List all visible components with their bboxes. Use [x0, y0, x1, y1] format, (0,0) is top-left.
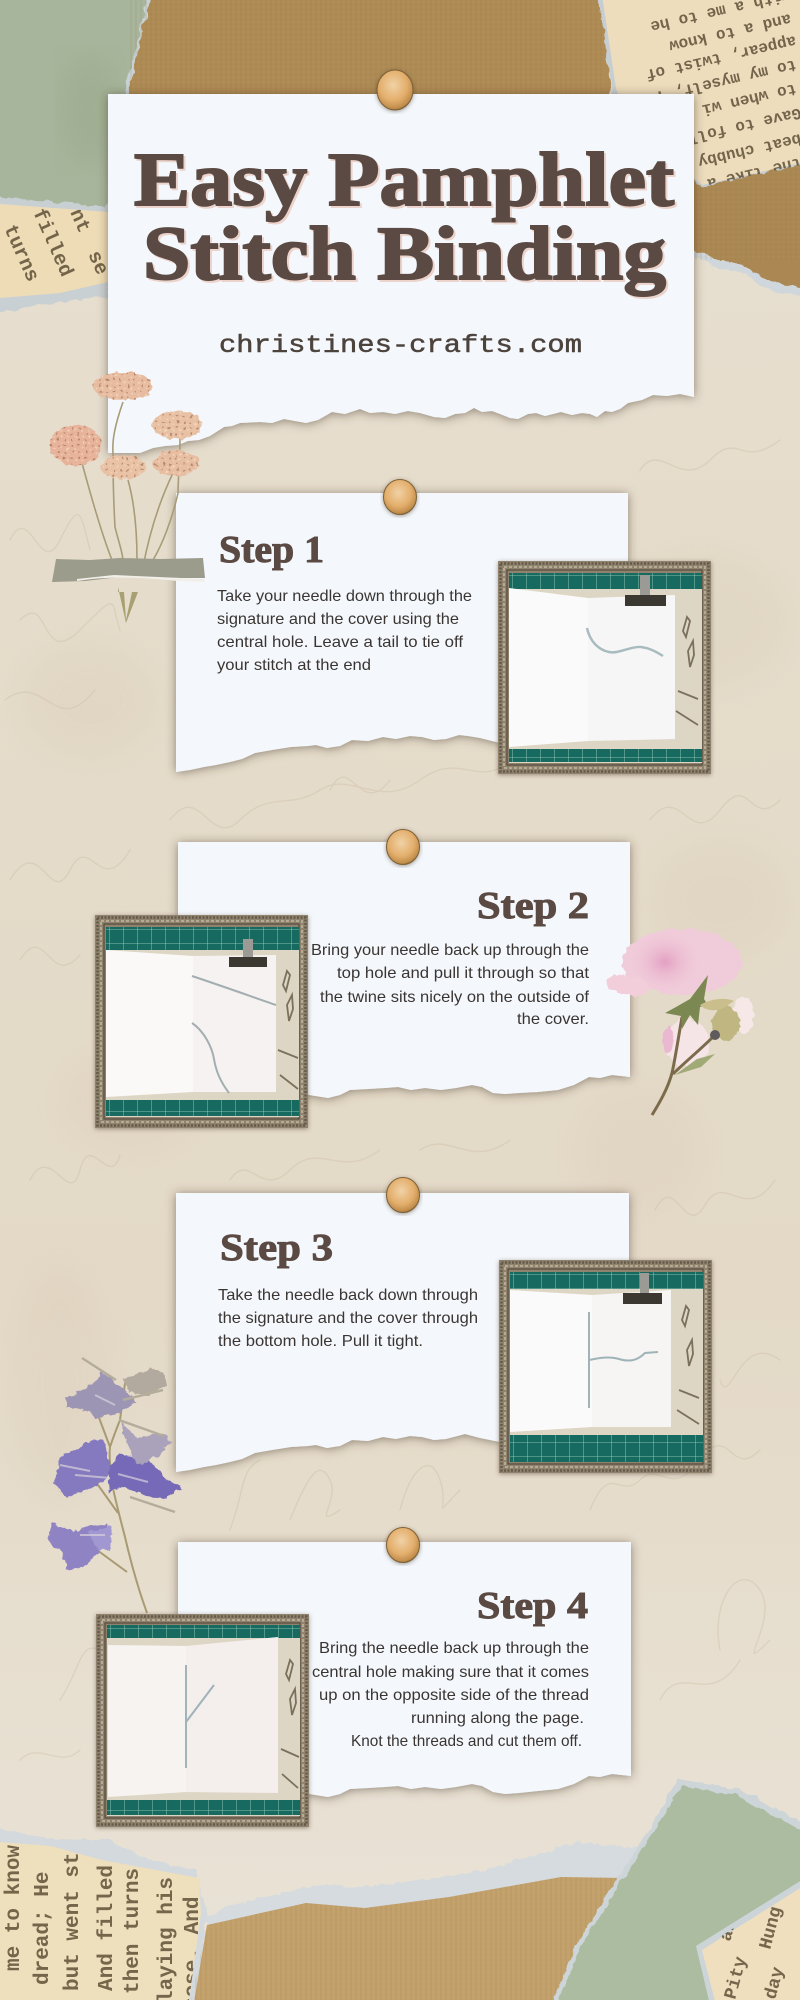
icon: step 2 pin: [386, 830, 420, 864]
step 4 text: running along the page.: [411, 1710, 584, 1727]
icon: step 3 pin: [386, 1178, 420, 1212]
icon: title pin: [377, 70, 413, 110]
washi tape: [52, 558, 205, 582]
flower: queen anne's lace with tape: [50, 372, 205, 623]
step 4 text: [312, 1640, 589, 1750]
step 3 text: the signature and the cover through: [218, 1310, 478, 1327]
step 1 heading: Step 1: [219, 529, 324, 571]
step 4 text: Bring the needle back up through the: [319, 1640, 589, 1657]
flower: rose: [605, 929, 754, 1115]
step 4 heading: Step 4: [477, 1585, 588, 1627]
collage: bottom left newspaper: [0, 1826, 207, 2000]
collage: bottom left newspaper: then turns: [122, 1868, 145, 1994]
collage: newspaper top right: to my myself, Y: [653, 55, 798, 105]
collage: newspaper top right: [595, 0, 800, 192]
title heading: Easy Pamphlet: [134, 138, 674, 222]
collage: bottom right newspaper: [696, 1878, 800, 2000]
step 3 text: [218, 1287, 478, 1350]
title heading shadow: Easy Pamphlet: [136, 140, 676, 224]
background: faded handwriting: [5, 440, 780, 1760]
step 4 text: central hole making sure that it comes: [312, 1664, 589, 1681]
collage: green paper top left: [0, 0, 154, 212]
step 1 text: central hole. Leave a tail to tie off: [217, 634, 464, 651]
step 3 heading: Step 3: [220, 1227, 333, 1269]
collage: newspaper top right: to when wi: [700, 79, 798, 118]
step 2 text: the cover.: [517, 1011, 589, 1028]
title heading shadow: Stitch Binding: [145, 214, 668, 298]
collage: kraft paper top: [128, 0, 612, 110]
panel: title card: [108, 94, 694, 453]
icon: step 1 pin: [384, 480, 416, 514]
step 2 heading: Step 2: [477, 885, 589, 927]
flower: delphinium: [48, 1358, 182, 1613]
step 2 text: [311, 942, 590, 1028]
collage: newspaper top right: the like a: [705, 153, 800, 192]
collage: newspaper left: [0, 196, 112, 316]
collage: newspaper top right: and a to know: [667, 9, 793, 55]
title heading shadow: [136, 140, 676, 298]
collage: bottom left newspaper: but went st: [62, 1852, 85, 1991]
collage: bottom left newspaper: laying his: [156, 1877, 179, 2000]
title heading: [134, 138, 674, 296]
photo: step 4 frame: [96, 1614, 309, 1827]
panel: step 4: [178, 1542, 631, 1797]
background: faded blotches: [10, 550, 790, 1500]
website: christines-crafts.com: [219, 331, 582, 360]
icon: step 4 pin: [386, 1528, 420, 1562]
collage: bottom left newspaper: me to know: [3, 1845, 26, 1971]
collage: newspaper top right: appear, twist of: [644, 31, 798, 83]
collage: bottom right newspaper: and: [716, 1907, 744, 1944]
collage: newspaper top right: beat chubby: [696, 129, 800, 171]
collage: bottom kraft paper: [191, 1842, 640, 2000]
step 2 text: top hole and pull it through so that: [337, 965, 590, 982]
panel: step 3: [176, 1193, 629, 1472]
collage: bottom green paper: [545, 1778, 800, 2000]
collage: newspaper top right: Gave to folly: [677, 103, 800, 149]
collage: bottom left newspaper: And filled: [96, 1865, 119, 1991]
collage: bottom right newspaper: Hung: [756, 1905, 787, 1952]
collage: kraft paper right: [680, 150, 800, 300]
title heading: Stitch Binding: [143, 212, 666, 296]
collage: bottom left newspaper: dread; He: [32, 1872, 55, 1985]
step 2 text: the twine sits nicely on the outside of: [320, 989, 590, 1006]
step 4 text: up on the opposite side of the thread: [319, 1687, 589, 1704]
step 4 text: Knot the threads and cut them off.: [351, 1733, 582, 1750]
collage: newspaper left: nt: [64, 205, 94, 237]
step 3 text: the bottom hole. Pull it tight.: [218, 1333, 423, 1350]
step 1 text: [217, 588, 472, 674]
photo: step 1 frame: [498, 561, 711, 774]
collage: newspaper left: filled: [27, 205, 77, 281]
collage: newspaper left: se: [82, 247, 112, 279]
panel: step 1: [176, 493, 628, 772]
panel: step 2: [178, 842, 630, 1098]
photo: step 3 frame: [499, 1260, 712, 1473]
photo: step 2 frame: [95, 915, 308, 1128]
step 1 text: signature and the cover using the: [217, 611, 459, 628]
step 1 text: Take your needle down through the: [217, 588, 472, 605]
step 2 text: Bring your needle back up through the: [311, 942, 589, 959]
step 1 text: your stitch at the end: [217, 657, 371, 674]
step 3 text: Take the needle back down through: [218, 1287, 478, 1304]
